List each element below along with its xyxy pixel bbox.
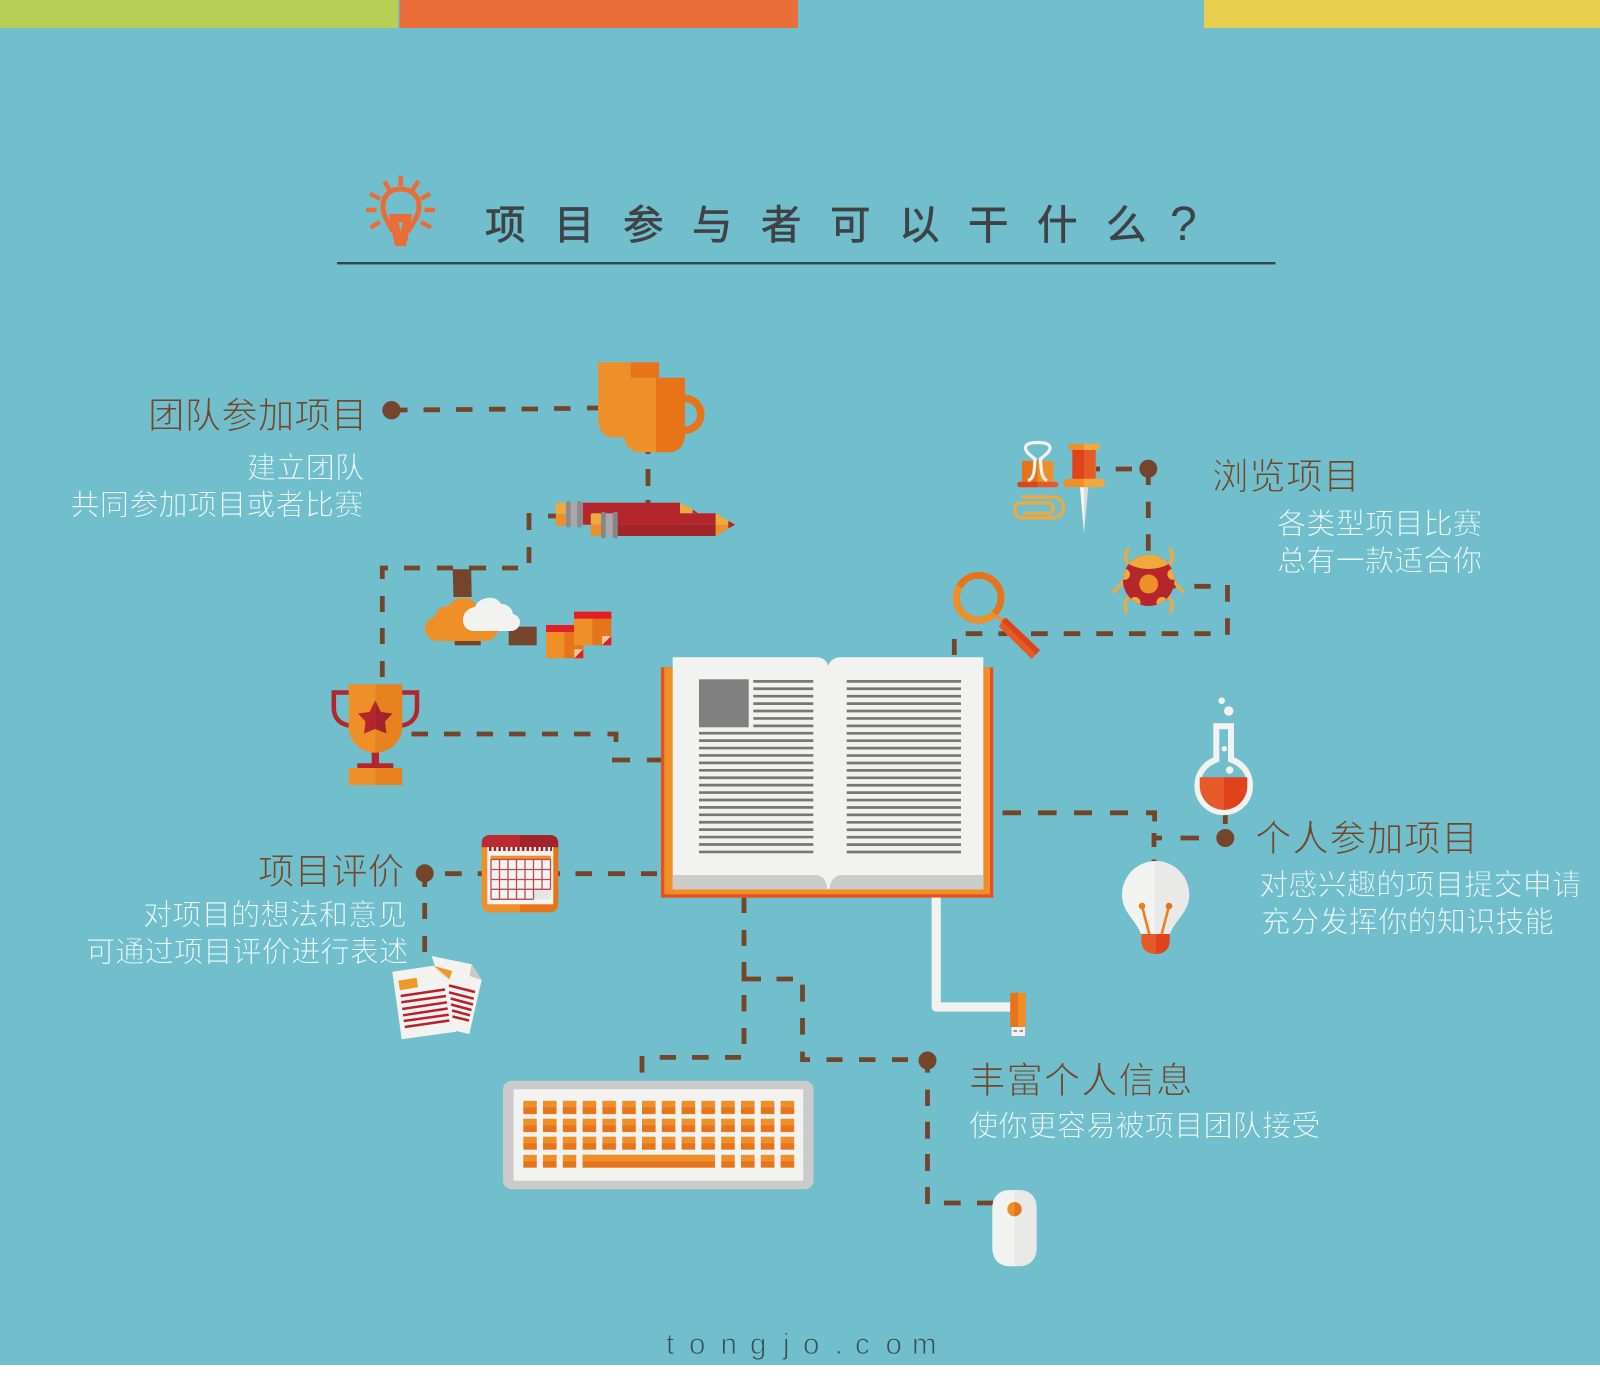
title: 项目参与者可以干什么 bbox=[485, 202, 1146, 248]
heading: individual participation: 个人参加项目 bbox=[1255, 818, 1479, 859]
icon: ladybug bbox=[1114, 541, 1183, 612]
heading: team participation: 团队参加项目 bbox=[148, 395, 367, 436]
book text lines bbox=[756, 680, 904, 854]
icon: pencils bbox=[556, 501, 735, 538]
book pages bbox=[673, 657, 983, 889]
icon: documents bbox=[392, 956, 482, 1039]
icon: paper clip bbox=[1015, 497, 1064, 518]
icon: mugs bbox=[598, 362, 701, 452]
icon: binder clip bbox=[1017, 442, 1058, 487]
text: team description bbox=[70, 452, 364, 522]
heading: enrich personal info: 丰富个人信息 bbox=[969, 1060, 1193, 1101]
connector dots bbox=[382, 401, 1234, 1070]
icon: clouds with brown blocks bbox=[425, 569, 537, 645]
text: individual description bbox=[1259, 869, 1581, 939]
icon: trophy bbox=[334, 684, 417, 785]
text: team description: 建立团队 bbox=[247, 452, 364, 485]
text: browse description: 总有一款适合你 bbox=[1277, 545, 1482, 578]
footer site name: tongjo.com bbox=[666, 1328, 937, 1361]
heading: project evaluation: 项目评价 bbox=[258, 851, 404, 892]
text: evaluation description: 可通过项目评价进行表述 bbox=[86, 936, 408, 969]
text: evaluation description: 对项目的想法和意见 bbox=[143, 899, 407, 932]
icon: push pin bbox=[1063, 444, 1105, 533]
text: evaluation description bbox=[86, 899, 408, 969]
text: team description: 共同参加项目或者比赛 bbox=[70, 489, 363, 522]
text: personal info description: 使你更容易被项目团队接受 bbox=[969, 1110, 1321, 1143]
icon: title light bulb bbox=[366, 176, 435, 246]
book image placeholder bbox=[699, 679, 749, 727]
icon: magnifier bbox=[956, 575, 1040, 659]
icon: calendar bbox=[482, 835, 558, 912]
title question mark: ? bbox=[1170, 198, 1197, 251]
icon: keyboard bbox=[503, 1081, 814, 1189]
top colour bars bbox=[0, 0, 1600, 28]
icon: mouse bbox=[992, 1190, 1037, 1266]
dashed connectors bbox=[382, 408, 1228, 1204]
icon: usb cable and stick bbox=[936, 898, 1026, 1036]
text: individual description: 对感兴趣的项目提交申请 bbox=[1259, 869, 1581, 902]
icon: light bulb bbox=[1122, 861, 1189, 954]
keyboard keys bbox=[523, 1101, 800, 1168]
icon: sticky note boxes bbox=[546, 612, 611, 658]
book page bottom shading bbox=[673, 875, 983, 889]
text: individual description: 充分发挥你的知识技能 bbox=[1261, 906, 1554, 939]
title rule bbox=[337, 262, 1276, 264]
heading: browse projects: 浏览项目 bbox=[1212, 456, 1360, 497]
text: browse description: 各类型项目比赛 bbox=[1277, 508, 1482, 541]
text: browse description bbox=[1277, 508, 1482, 578]
icon: flask bbox=[1197, 697, 1250, 812]
icon: open book bbox=[661, 657, 993, 898]
